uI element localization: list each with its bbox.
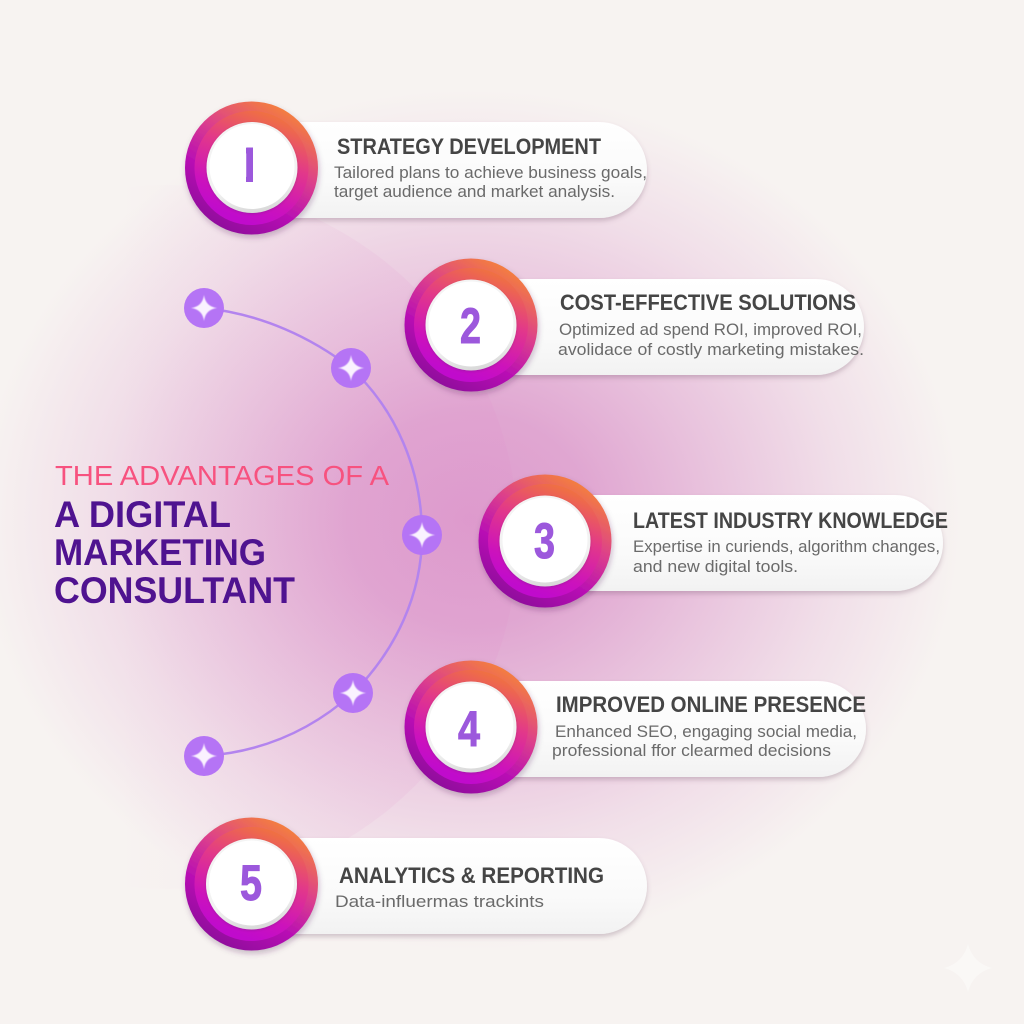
node 3	[402, 515, 442, 555]
panel: 2 cost-effective solutions	[404, 258, 864, 392]
panel: 4 improved online presence	[404, 660, 866, 794]
title main: A DIGITAL	[54, 494, 231, 535]
description: Expertise in curiends, algorithm changes,	[633, 537, 940, 556]
number badge 4: 4	[458, 701, 480, 757]
description: avolidace of costly marketing mistakes.	[558, 340, 864, 359]
panel: 3 latest industry knowledge	[478, 474, 948, 608]
heading: LATEST INDUSTRY KNOWLEDGE	[633, 508, 948, 533]
number badge 1: 1	[234, 137, 262, 193]
icon: faint sparkle bottom right	[944, 944, 992, 992]
description: target audience and market analysis.	[334, 182, 615, 201]
description	[633, 537, 940, 576]
heading: IMPROVED ONLINE PRESENCE	[556, 692, 866, 717]
title	[54, 460, 389, 611]
pill card	[545, 495, 943, 591]
heading: ANALYTICS & REPORTING	[339, 863, 604, 888]
pill card	[251, 122, 647, 218]
description: Optimized ad spend ROI, improved ROI,	[559, 320, 862, 339]
number badge 3: 3	[534, 513, 555, 569]
number badge 5: 5	[240, 855, 262, 911]
curved timeline with sparkle nodes	[184, 288, 442, 776]
description: Tailored plans to achieve business goals,	[334, 163, 647, 182]
description: and new digital tools.	[633, 557, 798, 576]
description: professional ffor clearmed decisions	[552, 741, 831, 760]
title kicker: THE ADVANTAGES OF A	[55, 460, 389, 491]
panel: 1 strategy development	[185, 102, 647, 234]
number badge 5	[185, 818, 318, 950]
description: Data-influermas trackints	[335, 892, 544, 911]
pill card	[471, 681, 866, 777]
description	[334, 163, 647, 201]
number badge 2: 2	[460, 298, 481, 354]
node 5	[184, 736, 224, 776]
heading: COST-EFFECTIVE SOLUTIONS	[560, 290, 856, 315]
pill card	[251, 838, 647, 934]
title main	[54, 494, 295, 611]
title main: MARKETING	[54, 532, 266, 573]
number badge 3	[478, 474, 612, 608]
number badge 4	[404, 660, 538, 794]
pill card	[471, 279, 864, 375]
heading: STRATEGY DEVELOPMENT	[337, 134, 602, 159]
title main: CONSULTANT	[54, 570, 295, 611]
number badge 1	[185, 102, 318, 234]
arc line	[204, 308, 422, 756]
description: Enhanced SEO, engaging social media,	[555, 722, 857, 741]
node 2	[331, 348, 371, 388]
node 4	[333, 673, 373, 713]
node 1	[184, 288, 224, 328]
description	[552, 722, 857, 760]
description	[558, 320, 864, 359]
number badge 2	[404, 258, 538, 392]
panel: 5 analytics and reporting	[185, 818, 647, 950]
